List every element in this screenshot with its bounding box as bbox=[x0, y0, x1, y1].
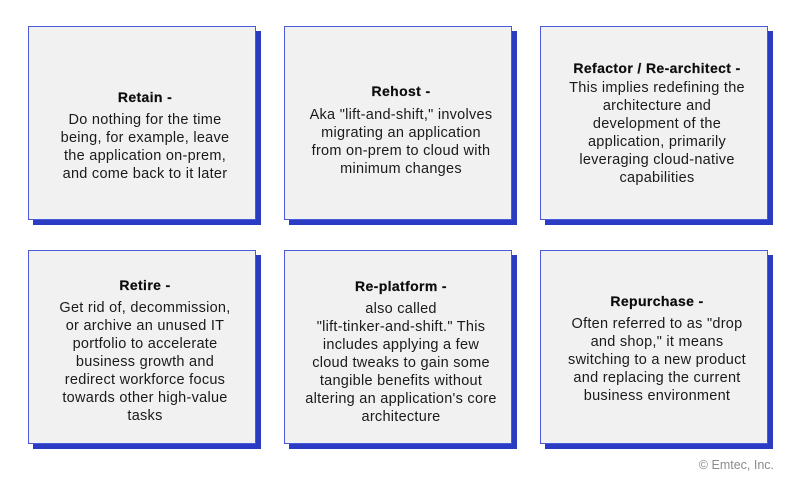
heading: Retire: Retire - bbox=[119, 277, 171, 293]
text: Re-platform description: altering an application's core bbox=[305, 391, 497, 407]
text: Retire description: or archive an unused IT bbox=[66, 318, 224, 334]
text: Re-platform description: architecture bbox=[362, 409, 440, 425]
text: Retire description: redirect workforce focus bbox=[65, 372, 225, 388]
text: Rehost description: from on-prem to cloud with bbox=[312, 143, 490, 159]
text: Retain description: and come back to it later bbox=[63, 166, 227, 182]
text: Retain description: Do nothing for the time bbox=[69, 112, 221, 128]
text: Retire description: towards other high-value bbox=[62, 390, 228, 406]
panel: Refactor / Re-architect bbox=[540, 26, 768, 220]
text: Repurchase description: business environment bbox=[584, 388, 730, 404]
text: Re-platform description: tangible benefits without bbox=[320, 373, 482, 389]
text: Refactor description: This implies redefining the bbox=[569, 80, 745, 96]
text: Repurchase description: and shop," it means bbox=[591, 334, 723, 350]
text: Retire description: portfolio to accelerate bbox=[73, 336, 217, 352]
text: Rehost description: Aka "lift-and-shift," involves bbox=[310, 107, 492, 123]
heading: Refactor / Re-architect: Refactor / Re-architect - bbox=[573, 60, 741, 76]
text: Repurchase description: Often referred to as "drop bbox=[572, 316, 742, 332]
text: Re-platform description: cloud tweaks to gain some bbox=[312, 355, 490, 371]
panel: Retire bbox=[28, 250, 256, 444]
panel: Retain bbox=[28, 26, 256, 220]
panel: Rehost bbox=[284, 26, 512, 220]
text: Re-platform description: "lift-tinker-and-shift." This bbox=[317, 319, 485, 335]
text: Retire description: Get rid of, decommission, bbox=[59, 300, 231, 316]
text: Retain description: being, for example, leave bbox=[61, 130, 229, 146]
text: Refactor description: architecture and bbox=[603, 98, 711, 114]
panel: Repurchase bbox=[540, 250, 768, 444]
text: Refactor description bbox=[569, 80, 745, 186]
text: Repurchase description bbox=[568, 316, 746, 404]
text: Retain description bbox=[61, 112, 229, 182]
text: Retain description: the application on-prem, bbox=[64, 148, 226, 164]
text: Retire description: tasks bbox=[127, 408, 163, 424]
text: Refactor description: leveraging cloud-native bbox=[579, 152, 735, 168]
text: Rehost description: minimum changes bbox=[340, 161, 462, 177]
heading: Retain: Retain - bbox=[118, 89, 172, 105]
heading: Re-platform: Re-platform - bbox=[355, 278, 447, 294]
panel: Re-platform bbox=[284, 250, 512, 444]
text: Refactor description: capabilities bbox=[620, 170, 694, 186]
text: Re-platform description bbox=[305, 301, 497, 425]
text: Retire description: business growth and bbox=[76, 354, 214, 370]
text: Rehost description: migrating an application bbox=[321, 125, 481, 141]
text: Rehost description bbox=[310, 107, 492, 177]
heading: Repurchase: Repurchase - bbox=[610, 293, 704, 309]
text: Re-platform description: includes applying a few bbox=[323, 337, 479, 353]
heading: Rehost: Rehost - bbox=[372, 83, 430, 99]
text: Refactor description: application, primarily bbox=[588, 134, 726, 150]
text: Refactor description: development of the bbox=[593, 116, 721, 132]
credit: © Emtec, Inc. bbox=[699, 458, 774, 472]
text: Repurchase description: switching to a new product bbox=[568, 352, 746, 368]
text: Re-platform description: also called bbox=[365, 301, 437, 317]
text: Retire description bbox=[59, 300, 231, 424]
text: Repurchase description: and replacing the current bbox=[573, 370, 741, 386]
